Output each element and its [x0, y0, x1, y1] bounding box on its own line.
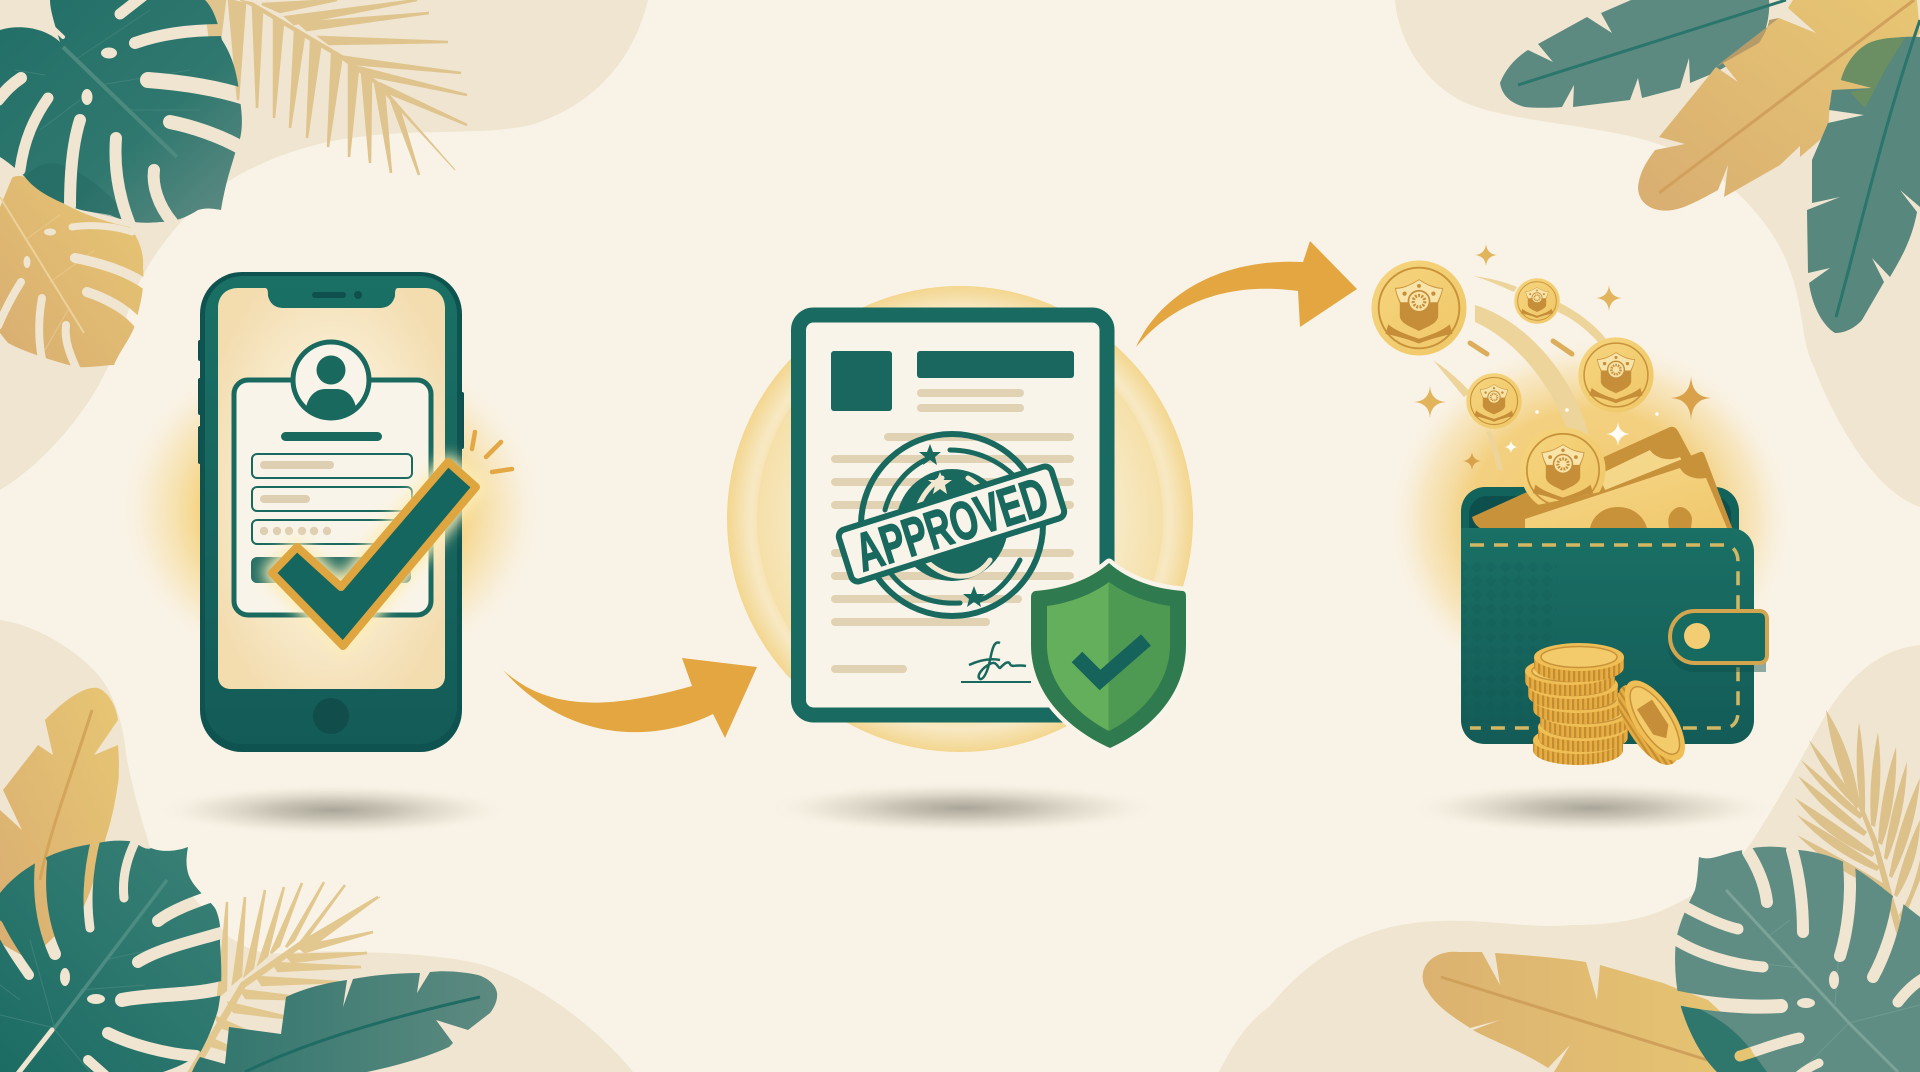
foliage: top right teal banana leaf	[1500, 0, 1786, 108]
header bar	[917, 351, 1074, 378]
foliage: top left gold monstera	[0, 176, 143, 367]
stamp stars	[919, 444, 985, 607]
wallet back	[1461, 487, 1739, 607]
name bar	[281, 432, 382, 441]
foliage: bottom teal banana leaf	[192, 971, 497, 1072]
foliage: bottom right teal monstera	[1675, 847, 1920, 1072]
flying coin 3	[1578, 337, 1654, 413]
step 2 group: approved document	[727, 286, 1193, 834]
wallet shadow	[1407, 782, 1777, 834]
foliage: top left teal monstera	[0, 0, 242, 223]
stamp rings	[861, 434, 1043, 616]
form card	[234, 342, 431, 615]
arrow: step 1 to step 2	[503, 658, 757, 738]
foliage: bottom left gold banana leaf	[0, 688, 119, 960]
step 1 group: phone verification	[116, 272, 546, 836]
leaning coin	[1606, 671, 1697, 774]
checkmark	[272, 462, 476, 646]
gold sparkles	[1414, 244, 1711, 470]
avatar	[293, 342, 369, 418]
flying coin 2	[1514, 278, 1560, 324]
wallet front	[1461, 528, 1754, 744]
submit button	[251, 557, 411, 583]
approved band: APPROVED	[848, 467, 1055, 583]
approved band	[836, 463, 1067, 587]
input field 2	[252, 487, 412, 511]
phone body	[198, 272, 464, 752]
signature	[961, 642, 1031, 682]
foliage: top left palm frond	[205, 0, 467, 175]
foliage: bottom left teal monstera	[0, 841, 221, 1072]
phone shadow	[153, 784, 513, 836]
stitching	[1470, 545, 1738, 728]
coin trails	[1433, 276, 1606, 470]
arrow: step 2 to step 3	[1136, 241, 1357, 347]
back bill	[1472, 427, 1730, 528]
foliage: bottom right gold banana leaf	[1423, 952, 1767, 1072]
front bill	[1513, 452, 1733, 530]
document shadow	[763, 782, 1163, 834]
foliage: top right teal banana leaf, right	[1807, 20, 1920, 333]
document halo disc	[727, 286, 1193, 752]
wallet clasp	[1668, 611, 1767, 672]
spark lines	[472, 432, 512, 472]
background blob: bottom left	[0, 620, 633, 1072]
security shield	[1031, 563, 1186, 748]
approved stamp	[836, 434, 1067, 616]
text lines	[831, 389, 1074, 673]
input field 1	[252, 454, 412, 478]
header block	[831, 351, 892, 411]
background blob: top right	[1395, 0, 1920, 507]
phone screen	[218, 288, 445, 689]
white sparkles	[1505, 408, 1659, 453]
leather texture	[1462, 560, 1557, 725]
input field 3	[252, 520, 412, 544]
foliage: bottom left palm frond	[188, 882, 380, 1072]
coin entering wallet	[1520, 427, 1606, 513]
background blob: bottom right	[1219, 645, 1920, 1072]
step 3 group: wallet payout	[1371, 244, 1795, 834]
flying coin 1	[1371, 260, 1467, 356]
checkmark glow	[273, 465, 474, 644]
foliage: top right gold banana leaf	[1638, 0, 1920, 211]
coin stack	[1525, 643, 1630, 765]
flying coin 4	[1466, 373, 1522, 429]
home button	[313, 698, 349, 734]
document page	[798, 315, 1107, 715]
phone glow	[116, 335, 546, 685]
foliage: bottom right palm frond	[1795, 710, 1920, 962]
background blob: top left	[0, 0, 648, 490]
wallet glow	[1385, 335, 1795, 705]
speaker and camera	[312, 292, 346, 298]
